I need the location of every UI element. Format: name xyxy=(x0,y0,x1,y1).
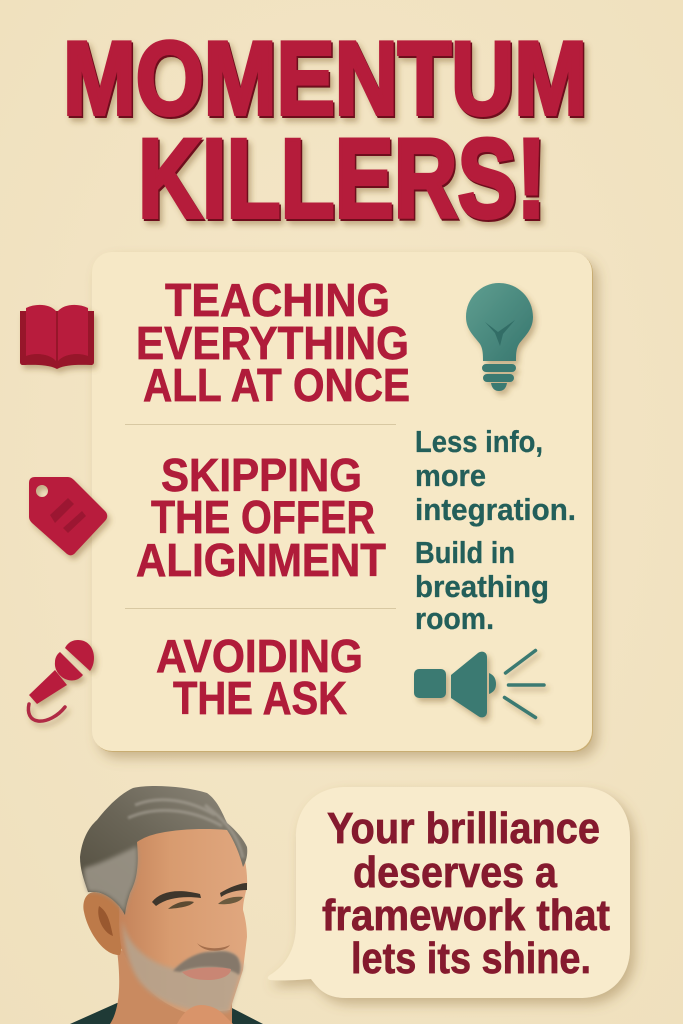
title line: MOMENTUM: MOMENTUM xyxy=(64,23,588,139)
icon: light bulb xyxy=(466,283,533,391)
moustache xyxy=(173,951,240,975)
bubble quote: Your brilliance xyxy=(327,804,600,853)
title line: KILLERS!: KILLERS! xyxy=(138,116,546,241)
shirt xyxy=(70,1003,263,1024)
advice text: more xyxy=(415,458,486,493)
beard xyxy=(122,920,243,1012)
ear xyxy=(83,892,128,955)
title line: KILLERS!: KILLERS! xyxy=(140,118,548,243)
advice text: room. xyxy=(415,601,494,636)
advice text xyxy=(415,424,576,636)
bubble quote: deserves a xyxy=(353,848,557,897)
eyes xyxy=(168,901,194,909)
advice text: integration. xyxy=(415,492,576,527)
icon: megaphone xyxy=(414,650,544,718)
item 1: Teaching everything all at once: ALL AT ONCE xyxy=(143,359,410,411)
nose shadow xyxy=(197,943,230,951)
item 2: Skipping the offer alignment: ALIGNMENT xyxy=(136,534,386,586)
advice text: Less info, xyxy=(415,424,543,459)
hand xyxy=(177,1005,233,1024)
item 3: Avoiding the ask xyxy=(156,630,363,724)
title xyxy=(63,21,588,243)
eyebrows xyxy=(152,891,201,906)
main panel xyxy=(92,252,593,752)
title line: MOMENTUM: MOMENTUM xyxy=(63,21,587,137)
item 2: Skipping the offer alignment: SKIPPING xyxy=(161,449,362,501)
icon: open book xyxy=(20,305,94,369)
advice text: breathing xyxy=(415,569,549,604)
lips xyxy=(182,967,231,980)
portrait of thoughtful man xyxy=(70,786,263,1024)
hair side grey xyxy=(84,846,138,915)
item 2: Skipping the offer alignment xyxy=(136,449,386,586)
item 2: Skipping the offer alignment: THE OFFER xyxy=(151,491,375,543)
item 3: Avoiding the ask: THE ASK xyxy=(173,672,347,724)
hair xyxy=(80,786,247,915)
item 1: Teaching everything all at once: TEACHING xyxy=(165,274,390,326)
bubble quote: lets its shine. xyxy=(351,934,591,983)
hair highlights xyxy=(128,800,243,858)
speech bubble xyxy=(268,787,630,998)
neck xyxy=(110,950,232,1024)
item 1: Teaching everything all at once xyxy=(136,274,410,411)
bubble quote: framework that xyxy=(322,891,610,940)
item 3: Avoiding the ask: AVOIDING xyxy=(156,630,363,682)
advice text: Build in xyxy=(415,535,515,570)
icon: microphone xyxy=(28,640,94,721)
item 1: Teaching everything all at once: EVERYTHING xyxy=(136,317,409,369)
face xyxy=(119,828,247,1014)
icon: price tag xyxy=(29,477,107,555)
bubble quote xyxy=(322,804,610,983)
